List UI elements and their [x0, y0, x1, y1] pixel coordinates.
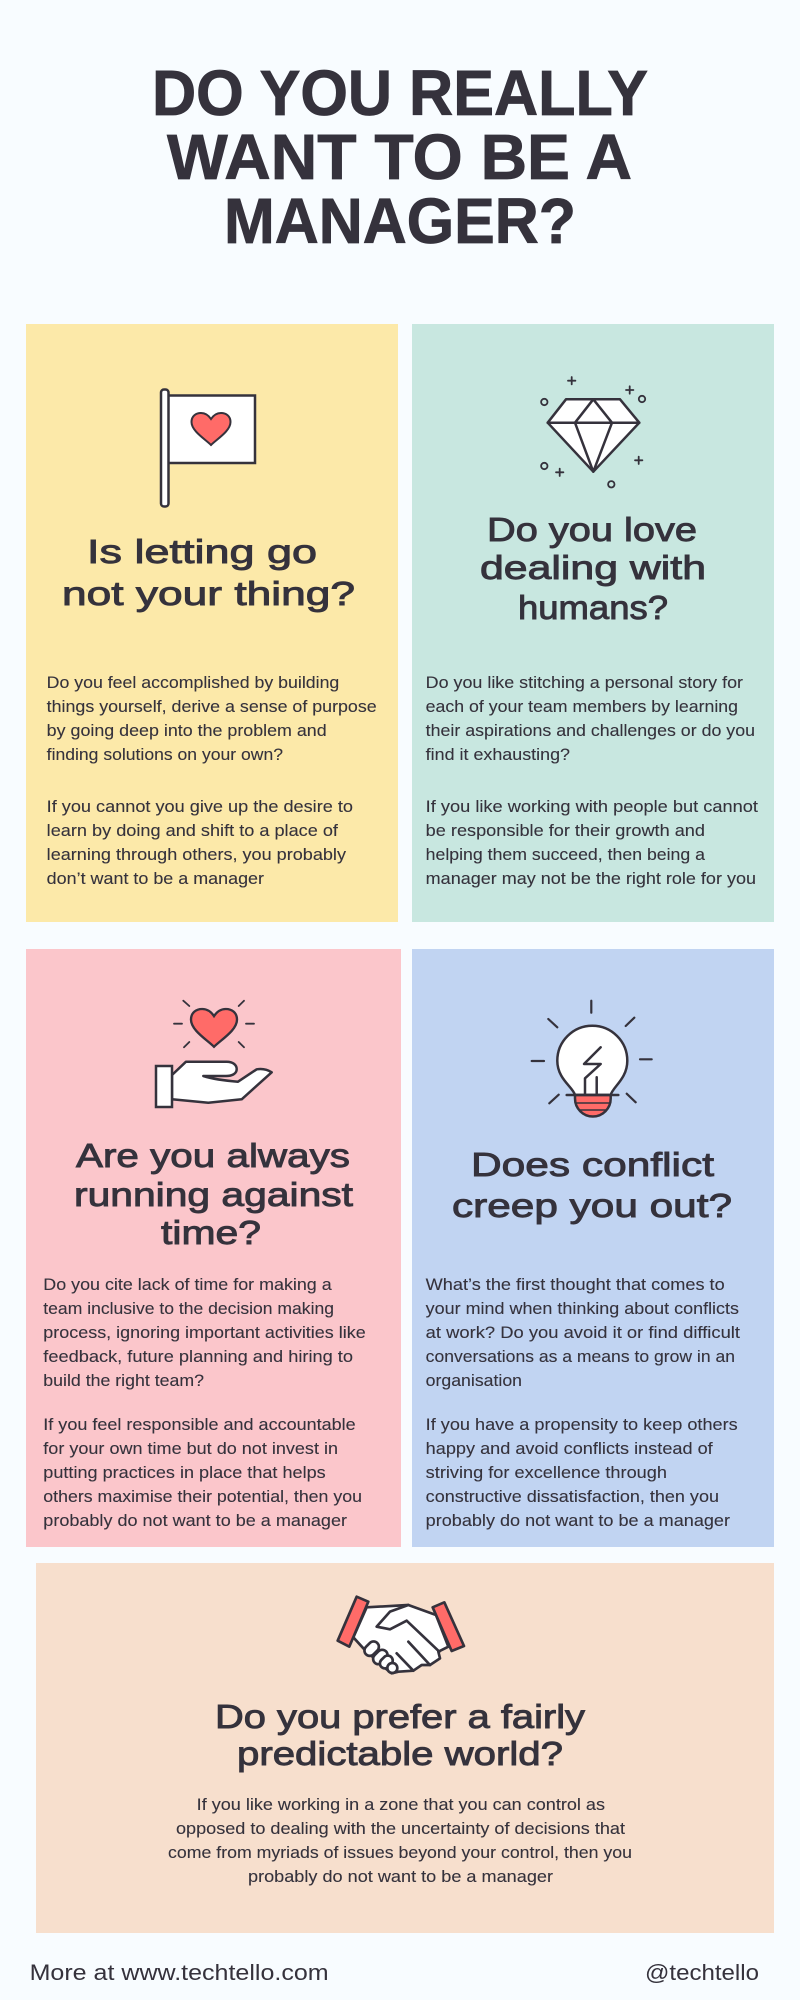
text block: conflict: constructive dissatisfaction, then you: [426, 1488, 719, 1506]
text block: letting go: by going deep into the problem and: [47, 722, 327, 740]
text block: letting go: If you cannot you give up the desire to: [47, 798, 353, 816]
heading: running against time: [74, 1137, 353, 1251]
panel: conflict: [412, 949, 774, 1547]
text block: running against time: probably do not want to be a manager: [43, 1512, 348, 1530]
text block: conflict: happy and avoid conflicts instead of: [426, 1440, 713, 1458]
panel: dealing with humans: [412, 324, 774, 922]
text block: dealing with humans: Do you like stitching a personal story for: [426, 674, 744, 692]
text block: letting go: things yourself, derive a sense of purpose: [47, 698, 377, 716]
text block: dealing with humans: helping them succeed, then being a: [426, 846, 706, 864]
text block: predictable world: probably do not want to be a manager: [248, 1868, 554, 1886]
icon: hand holding heart: [156, 1001, 272, 1107]
icon: light bulb: [532, 1001, 652, 1116]
text block: conflict: striving for excellence through: [426, 1464, 667, 1482]
text block: dealing with humans: their aspirations and challenges or do you: [426, 722, 755, 740]
heading: running against time: running against: [74, 1176, 353, 1213]
title: [152, 57, 648, 257]
heading: predictable world: predictable world?: [237, 1735, 563, 1772]
heading: conflict: creep you out?: [452, 1187, 732, 1224]
heading: conflict: [452, 1146, 732, 1224]
text block: conflict: conversations as a means to grow in an: [426, 1348, 735, 1366]
text block: conflict: at work? Do you avoid it or find difficult: [426, 1324, 740, 1342]
title: DO YOU REALLY: [152, 57, 648, 129]
heading: running against time: time?: [161, 1214, 261, 1251]
heading: letting go: not your thing?: [62, 575, 355, 612]
title: WANT TO BE A: [167, 121, 632, 193]
text block: dealing with humans: [426, 674, 758, 888]
heading: predictable world: [215, 1698, 586, 1772]
heading: running against time: Are you always: [76, 1137, 350, 1174]
heading: dealing with humans: [480, 511, 706, 626]
text block: letting go: finding solutions on your own?: [47, 746, 283, 764]
text block: running against time: process, ignoring important activities like: [43, 1324, 366, 1342]
text block: running against time: Do you cite lack of time for making a: [43, 1276, 333, 1294]
text block: letting go: learn by doing and shift to a place of: [47, 822, 338, 840]
title: MANAGER?: [224, 185, 576, 257]
footer: handle: @techtello: [645, 1960, 759, 1985]
text block: running against time: for your own time but do not invest in: [43, 1440, 338, 1458]
text block: dealing with humans: each of your team members by learning: [426, 698, 738, 716]
text block: running against time: If you feel responsible and accountable: [43, 1416, 356, 1434]
text block: dealing with humans: manager may not be the right role for you: [426, 870, 756, 888]
text block: dealing with humans: be responsible for their growth and: [426, 822, 705, 840]
text block: running against time: putting practices in place that helps: [43, 1464, 326, 1482]
icon: handshake: [338, 1597, 464, 1673]
text block: running against time: others maximise their potential, then you: [43, 1488, 362, 1506]
panel: letting go: [26, 324, 398, 922]
text block: letting go: Do you feel accomplished by building: [47, 674, 339, 692]
text block: letting go: don’t want to be a manager: [47, 870, 265, 888]
text block: dealing with humans: If you like working with people but cannot: [426, 798, 758, 816]
footer: website: More at www.techtello.com: [30, 1960, 329, 1985]
heading: dealing with humans: humans?: [518, 589, 668, 626]
panel: predictable world: [36, 1563, 774, 1933]
text block: conflict: What’s the first thought that comes to: [426, 1276, 725, 1294]
text block: running against time: feedback, future planning and hiring to: [43, 1348, 353, 1366]
text block: running against time: build the right team?: [43, 1372, 204, 1390]
text block: predictable world: If you like working in a zone that you can control as: [197, 1796, 605, 1814]
text block: letting go: learning through others, you probably: [47, 846, 347, 864]
heading: letting go: [62, 533, 355, 612]
panel: running against time: [26, 949, 401, 1547]
text block: running against time: [43, 1276, 366, 1530]
text block: conflict: probably do not want to be a manager: [426, 1512, 731, 1530]
heading: conflict: Does conflict: [471, 1146, 714, 1183]
text block: dealing with humans: find it exhausting?: [426, 746, 570, 764]
heading: dealing with humans: dealing with: [480, 549, 706, 586]
text block: conflict: organisation: [426, 1372, 522, 1390]
text block: predictable world: [168, 1796, 632, 1886]
icon: flag with heart: [161, 390, 255, 506]
text block: conflict: your mind when thinking about conflicts: [426, 1300, 739, 1318]
text block: conflict: If you have a propensity to keep others: [426, 1416, 738, 1434]
text block: letting go: [47, 674, 377, 888]
text block: conflict: [426, 1276, 740, 1530]
text block: predictable world: come from myriads of issues beyond your control, then you: [168, 1844, 632, 1862]
text block: predictable world: opposed to dealing with the uncertainty of decisions that: [176, 1820, 625, 1838]
heading: letting go: Is letting go: [87, 533, 317, 570]
heading: predictable world: Do you prefer a fairly: [215, 1698, 586, 1735]
heading: dealing with humans: Do you love: [487, 511, 697, 548]
icon: diamond with sparkles: [541, 377, 645, 487]
text block: running against time: team inclusive to the decision making: [43, 1300, 334, 1318]
